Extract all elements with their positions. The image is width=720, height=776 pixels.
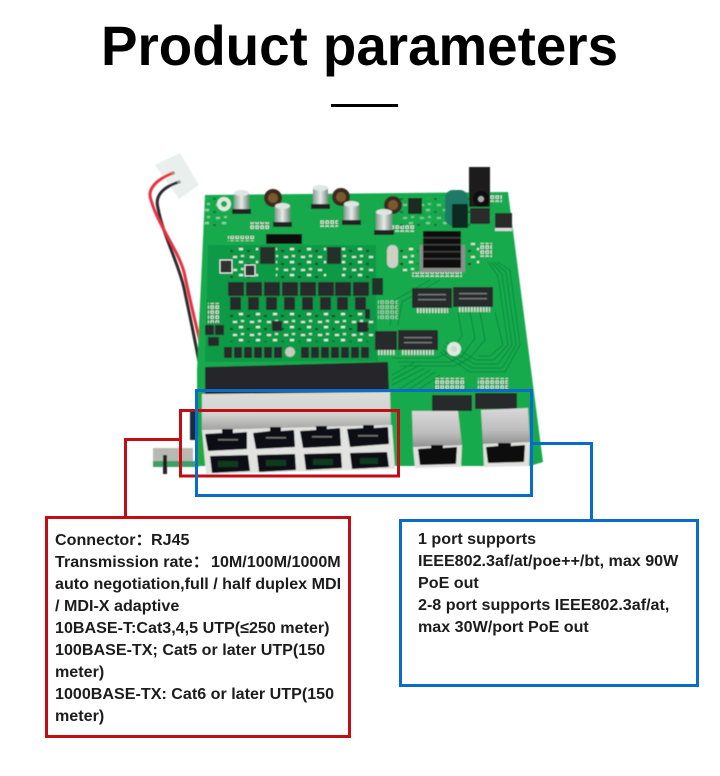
panel: PoE specifications: 1 port supports — [418, 530, 536, 548]
MOSFET rows — [205, 282, 370, 358]
panel: PoE specifications: max 30W/port PoE out — [418, 618, 589, 636]
red highlight: 8 ports — [180, 410, 398, 476]
red connector line — [126, 440, 180, 517]
left side switch — [153, 410, 204, 474]
panel: PoE specifications: 2-8 port supports IEEE802.3af/at, — [418, 596, 669, 614]
panel: RJ45 connector specifications: meter) — [55, 707, 104, 725]
panel: RJ45 connector specifications: Transmission rate： — [55, 553, 209, 571]
product photo: PoE switch circuit board — [150, 153, 543, 474]
panel: RJ45 connector specifications: / MDI-X adaptive — [55, 597, 179, 615]
transformers — [375, 287, 517, 411]
panel: PoE specifications: IEEE802.3af/at/poe++/bt, max 90W — [418, 552, 679, 570]
panel: RJ45 connector specifications: RJ45 — [151, 531, 190, 549]
panel: RJ45 connector specifications: Connector： — [55, 531, 152, 549]
title underline — [331, 104, 398, 107]
two uplink RJ45 ports — [412, 408, 530, 468]
power wires and connector — [150, 153, 205, 362]
copper traces — [390, 262, 520, 390]
8-port RJ45 block — [202, 362, 395, 474]
panel: PoE specifications — [400, 520, 698, 686]
panel: RJ45 connector specifications: 10M/100M/1000M — [211, 553, 341, 571]
panel: RJ45 connector specifications: meter) — [55, 663, 104, 681]
capacitors and inductors — [220, 167, 512, 295]
panel: RJ45 connector specifications: 100BASE-TX; Cat5 or later UTP(150 — [55, 641, 325, 659]
panel: RJ45 connector specifications — [46, 518, 350, 736]
heat sink — [420, 231, 465, 272]
panel: PoE specifications: PoE out — [418, 574, 479, 592]
panel: RJ45 connector specifications: 10BASE-T:Cat3,4,5 UTP(≤250 meter) — [55, 619, 329, 637]
blue connector line — [532, 444, 592, 520]
title: Product parameters — [101, 14, 618, 77]
panel: RJ45 connector specifications: auto negotiation,full / half duplex MDI — [55, 575, 341, 593]
small component clusters — [205, 195, 508, 390]
circuit board — [197, 192, 543, 466]
panel: RJ45 connector specifications: 1000BASE-TX: Cat6 or later UTP(150 — [55, 685, 334, 703]
blue highlight: all ports — [196, 390, 532, 496]
